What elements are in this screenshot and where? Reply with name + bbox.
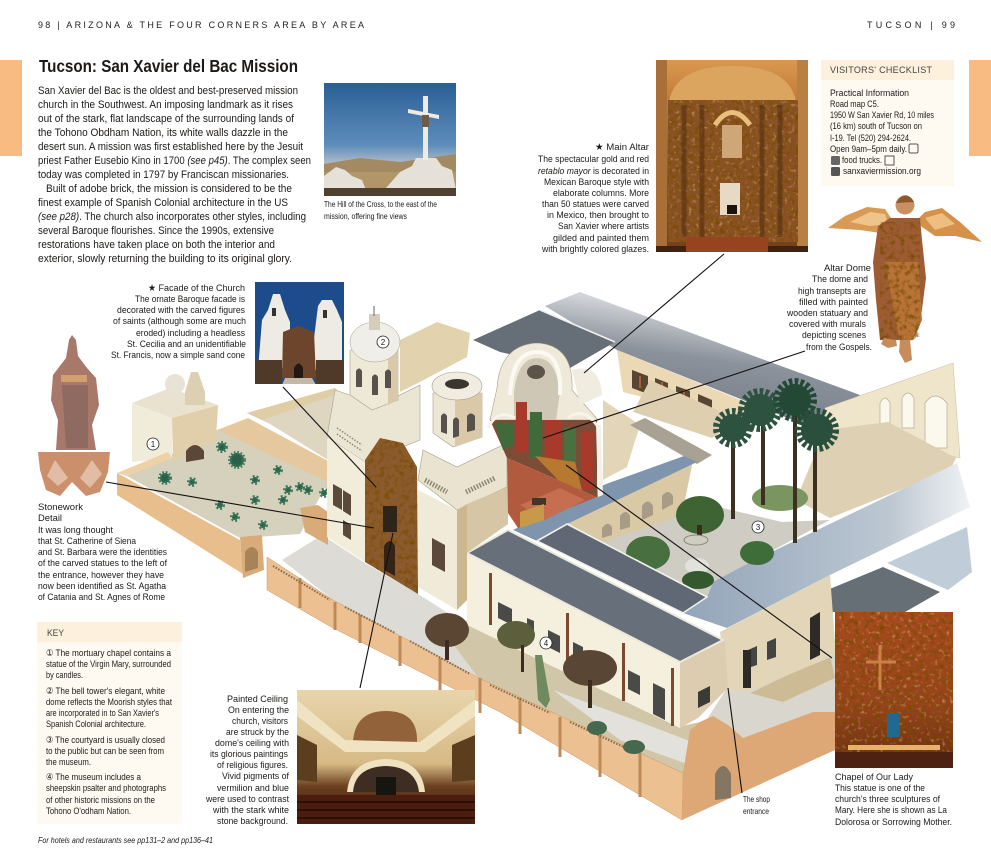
stonework caption: that St. Catherine of Siena bbox=[38, 536, 137, 547]
museum windows and pilasters bbox=[489, 573, 674, 726]
facade caption: of saints (although some are much bbox=[113, 316, 246, 327]
stonework caption: Stonework bbox=[38, 502, 83, 513]
main altar caption: than 50 statues were carved bbox=[542, 199, 649, 210]
facade caption: eroded) including a headless bbox=[136, 328, 245, 339]
museum front wall bbox=[467, 553, 680, 728]
angel statue bbox=[828, 195, 982, 363]
leader: shop entrance bbox=[728, 688, 742, 793]
right facade wall bbox=[418, 490, 467, 610]
intro text block: (see p28). The church also incorporates other styles, including bbox=[38, 211, 306, 223]
painted ceiling caption: dome's ceiling with bbox=[215, 738, 289, 749]
intro text block: exterior, slowly returning the building to its original glory. bbox=[38, 253, 292, 265]
gravel behind cutaway bbox=[633, 380, 740, 438]
garden front wall bbox=[117, 473, 243, 574]
intro text block: Built of adobe brick, the mission is considered to be the bbox=[46, 183, 292, 195]
checklist details: sanxaviermission.org bbox=[843, 166, 921, 177]
painted ceiling caption: of religious figures. bbox=[217, 760, 288, 771]
intro text block: San Xavier del Bac is the oldest and best-preserved mission bbox=[38, 85, 298, 97]
photo: painted ceiling interior bbox=[297, 690, 475, 824]
arcade behind the dome bbox=[617, 350, 748, 422]
intro text block: several Baroque flourishes. Since the 1990s, extensive bbox=[38, 225, 274, 237]
key item 4: ④ The museum includes a bbox=[46, 772, 142, 783]
checklist details: 1950 W San Xavier Rd, 10 miles bbox=[830, 110, 934, 121]
stonework caption: It was long thought bbox=[38, 525, 113, 536]
right orange tab bbox=[969, 60, 991, 156]
main altar caption: The spectacular gold and red bbox=[538, 154, 649, 165]
left tower bbox=[327, 306, 420, 462]
right street roof bbox=[683, 463, 970, 628]
running header left: 98 | ARIZONA & THE FOUR CORNERS AREA BY AREA bbox=[38, 20, 364, 30]
intro text block: restorations have taken place on both the interior and bbox=[38, 239, 275, 251]
title: Tucson: San Xavier del Bac Mission bbox=[39, 56, 298, 76]
photo: chapel of Our Lady bbox=[835, 612, 953, 768]
facade caption: The ornate Baroque facade is bbox=[135, 294, 245, 305]
painted ceiling caption: Painted Ceiling bbox=[227, 694, 288, 705]
shop entrance label: The shop bbox=[743, 794, 770, 804]
altar dome caption bbox=[786, 263, 872, 353]
stonework statue bbox=[38, 335, 110, 496]
stonework caption: of Catania and St. Agnes of Rome bbox=[38, 592, 165, 603]
photo: main altar retablo bbox=[656, 60, 808, 252]
intro text block: finest example of Spanish Colonial architecture in the US bbox=[38, 197, 288, 209]
photo: Hill of the Cross bbox=[324, 83, 456, 196]
key item 2 bbox=[46, 686, 172, 730]
ruined rear wall bbox=[400, 322, 470, 392]
checklist details: I-19. Tel (520) 294-2624. bbox=[830, 133, 911, 144]
key item 3: ③ The courtyard is usually closed bbox=[46, 735, 165, 746]
painted ceiling caption: On entering the bbox=[228, 705, 289, 716]
shop entrance label bbox=[743, 794, 770, 816]
perimeter wall bbox=[267, 557, 835, 820]
stonework caption bbox=[38, 502, 167, 603]
main altar caption: Mexican Baroque style with bbox=[544, 177, 649, 188]
main altar caption: San Xavier where artists bbox=[558, 221, 649, 232]
intro text block: church in the Southwest. An imposing landmark as it rises bbox=[38, 99, 293, 111]
intro text block: out of the stark, flat landscape of the surrounding lands of bbox=[38, 113, 294, 125]
courtyard planting bbox=[626, 485, 808, 589]
panel: key bbox=[37, 622, 182, 824]
leader: main altar bbox=[584, 254, 724, 373]
stonework caption: now been identified as St. Agatha bbox=[38, 581, 167, 592]
leader: facade bbox=[283, 387, 376, 487]
checklist details: Practical Information bbox=[830, 88, 909, 99]
shop extension wall bbox=[720, 575, 836, 692]
main altar caption: ★ Main Altar bbox=[595, 142, 650, 153]
intro text block: today was completed in 1797 by Franciscan missionaries. bbox=[38, 169, 289, 181]
leader: stonework bbox=[106, 482, 374, 528]
intro text block bbox=[38, 85, 311, 265]
courtyard arcade wall bbox=[567, 460, 693, 545]
transept side wall and trellis bbox=[603, 400, 712, 480]
photo: facade of the church bbox=[254, 281, 345, 385]
key item 4: of other historic missions on the bbox=[46, 795, 155, 806]
key item 2: Spanish Colonial architecture. bbox=[46, 719, 146, 730]
right low roof bbox=[887, 527, 972, 590]
altar dome caption: high transepts are bbox=[798, 286, 866, 297]
painted ceiling caption: with the stark white bbox=[212, 805, 289, 816]
running header right: TUCSON | 99 bbox=[867, 20, 955, 30]
stonework caption: the entrance, however they have bbox=[38, 570, 164, 581]
leader: painted ceiling bbox=[360, 533, 393, 688]
footer note: For hotels and restaurants see pp131–2 and pp136–41 bbox=[38, 835, 213, 845]
facade caption: St. Cecilia and an unidentifiable bbox=[127, 339, 246, 350]
number markers bbox=[147, 336, 764, 649]
right background wall bbox=[825, 363, 960, 458]
facade caption: St. Francis, now a simple sand cone bbox=[111, 350, 245, 361]
intro text block: desert sun. A mission was first established here by the Jesuit bbox=[38, 141, 303, 153]
courtyard pavement bbox=[590, 498, 830, 598]
altar dome caption: from the Gospels. bbox=[806, 342, 872, 353]
main altar caption: in Mexico, then brought to bbox=[547, 210, 649, 221]
intro text block: priest Father Eusebio Kino in 1700 (see p45). The complex seen bbox=[38, 155, 311, 167]
left orange tab bbox=[0, 60, 22, 156]
main altar caption: retablo mayor is decorated in bbox=[538, 166, 649, 177]
left facade wall bbox=[327, 437, 365, 562]
side wall beneath the transept bbox=[467, 487, 508, 553]
chapel caption bbox=[835, 772, 952, 828]
painted ceiling caption: stone background. bbox=[217, 816, 288, 827]
museum garden trees bbox=[425, 613, 617, 708]
mortuary chapel bbox=[132, 372, 218, 462]
front shrubs bbox=[587, 721, 645, 754]
facade caption bbox=[111, 283, 246, 361]
key item 3 bbox=[46, 735, 165, 768]
museum main roof bbox=[467, 530, 723, 662]
palm trees bbox=[719, 384, 833, 543]
key item 4: sheepskin psalter and photographs bbox=[46, 783, 166, 794]
painted ceiling caption bbox=[205, 694, 289, 827]
right tower bbox=[418, 372, 507, 510]
key item 2: ② The bell tower's elegant, white bbox=[46, 686, 165, 697]
chapel caption: Mary. Here she is shown as La bbox=[835, 805, 948, 816]
key item 1: statue of the Virgin Mary, surrounded bbox=[46, 659, 171, 670]
stonework caption: Detail bbox=[38, 513, 62, 524]
key item 4 bbox=[46, 772, 166, 817]
painted ceiling caption: are struck by the bbox=[226, 727, 289, 738]
facade caption: decorated with the carved figures bbox=[117, 305, 245, 316]
garden plants bbox=[160, 443, 327, 537]
main altar caption: with brightly colored glazes. bbox=[541, 244, 649, 255]
altar dome caption: covered with murals bbox=[789, 319, 866, 330]
key heading: KEY bbox=[47, 628, 65, 639]
photo caption: Hill of the Cross: The Hill of the Cross, to the east of the bbox=[324, 200, 437, 209]
museum inner roof bbox=[537, 524, 707, 613]
leader: chapel of Our Lady bbox=[566, 465, 832, 658]
shop entrance label: entrance bbox=[743, 806, 769, 816]
number markers: 4 bbox=[544, 639, 549, 648]
painted ceiling caption: vermilion and blue bbox=[217, 783, 289, 794]
garden back wall and floor bbox=[127, 418, 330, 538]
altar dome caption: Altar Dome bbox=[824, 263, 871, 274]
checklist details bbox=[830, 88, 934, 177]
panel: visitors' checklist bbox=[821, 60, 954, 186]
photo caption: Hill of the Cross: mission, offering fine views bbox=[324, 212, 407, 221]
number markers: 2 bbox=[381, 338, 386, 347]
checklist heading: VISITORS' CHECKLIST bbox=[830, 65, 932, 75]
museum end wall bbox=[680, 640, 728, 728]
back roofs bbox=[473, 292, 860, 425]
leader: altar dome bbox=[543, 351, 805, 438]
key item 1: ① The mortuary chapel contains a bbox=[46, 648, 172, 659]
altar dome caption: The dome and bbox=[812, 274, 868, 285]
leader lines bbox=[106, 254, 832, 793]
altar dome cutaway bbox=[488, 343, 603, 528]
right gravel yard bbox=[796, 422, 956, 518]
blue roof strip bbox=[513, 456, 697, 541]
altar murals bbox=[495, 402, 593, 490]
main altar caption: elaborate columns. More bbox=[553, 188, 649, 199]
sand wall behind the church bbox=[247, 388, 345, 460]
key item 2: dome reflects the Moorish styles that bbox=[46, 697, 172, 708]
key item 3: the museum. bbox=[46, 757, 91, 768]
chapel caption: Chapel of Our Lady bbox=[835, 772, 913, 783]
key item 2: are incorporated in to San Xavier's bbox=[46, 708, 159, 719]
baroque facade retablo bbox=[365, 438, 418, 594]
number markers: 3 bbox=[756, 523, 761, 532]
painted ceiling caption: its glorious paintings bbox=[210, 749, 288, 760]
plaza paving bbox=[282, 535, 480, 678]
main altar caption bbox=[538, 142, 650, 255]
photo caption: Hill of the Cross bbox=[324, 200, 437, 221]
checklist details: Open 9am–5pm daily. bbox=[830, 144, 907, 155]
number markers: 1 bbox=[151, 440, 156, 449]
checklist details: food trucks. bbox=[842, 155, 882, 166]
painted ceiling caption: Vivid pigments of bbox=[222, 771, 289, 782]
stonework caption: and St. Barbara were the identities bbox=[38, 547, 167, 558]
chapel caption: Dolorosa or Sorrowing Mother. bbox=[835, 817, 952, 828]
painted ceiling caption: church, visitors bbox=[232, 716, 288, 727]
key item 1 bbox=[46, 648, 172, 681]
altar dome caption: depicting scenes bbox=[802, 330, 866, 341]
key item 4: Tohono O'odham Nation. bbox=[46, 806, 131, 817]
facade caption: ★ Facade of the Church bbox=[148, 283, 245, 294]
altar dome caption: wooden statuary and bbox=[786, 308, 868, 319]
stonework caption: of the carved statues to the left of bbox=[38, 558, 167, 569]
museum forecourt ground bbox=[450, 620, 835, 790]
altar dome caption: filled with painted bbox=[799, 297, 868, 308]
main altar caption: gilded and painted them bbox=[553, 233, 649, 244]
checklist details: Road map C5. bbox=[830, 99, 879, 110]
intro text block: the Tohono Obdham Nation, its white walls dazzle in the bbox=[38, 127, 288, 139]
chapel caption: This statue is one of the bbox=[835, 783, 925, 794]
cutaway illustration of the mission bbox=[117, 292, 972, 820]
painted ceiling caption: were used to contrast bbox=[205, 794, 289, 805]
key item 1: by candles. bbox=[46, 670, 83, 681]
chapel caption: church's three sculptures of bbox=[835, 794, 940, 805]
key item 3: to the public but can be seen from bbox=[46, 746, 164, 757]
checklist details: (16 km) south of Tucson on bbox=[830, 121, 922, 132]
